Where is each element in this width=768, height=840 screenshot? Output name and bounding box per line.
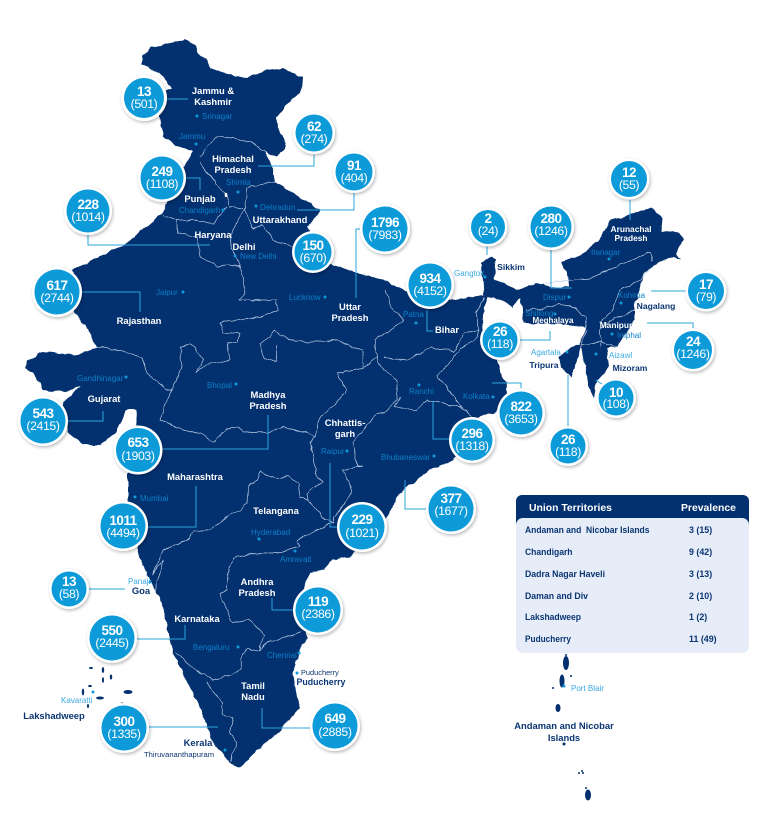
islands: Andaman and Nicobar	[552, 654, 591, 800]
state labels: garh	[335, 428, 355, 439]
capital labels: Kohima	[618, 291, 646, 300]
bubble: Tamil Nadu	[310, 701, 360, 751]
state labels	[23, 85, 675, 748]
state labels: Nadu	[241, 691, 265, 702]
bubble: Andhra Pradesh: (2386)	[301, 607, 335, 621]
capital labels: Puducherry	[301, 668, 339, 677]
bubble: Mizoram: 10	[609, 385, 623, 400]
bubble: Meghalaya: (118)	[487, 337, 513, 351]
table: Union Territories: Daman and Div	[525, 591, 588, 601]
capital labels: Kolkata	[463, 392, 490, 401]
bubble: Manipur: (1246)	[676, 347, 710, 361]
table: Union Territories: Andaman and Nicobar Islands	[525, 525, 650, 535]
bubble: Uttarakhand: (404)	[341, 171, 368, 185]
marker: Chandigarh territory	[225, 193, 227, 197]
bubble: Jammu and Kashmir	[121, 75, 167, 121]
table: Union Territories: Puducherry	[525, 634, 571, 644]
capital labels: Thiruvananthapuram	[144, 750, 214, 759]
bubble: Manipur	[672, 328, 714, 372]
bubble: Chhattisgarh: 229	[351, 512, 373, 527]
table: Union Territories: Chandigarh	[525, 547, 572, 557]
state labels: Pradesh	[614, 233, 648, 243]
capital markers	[92, 114, 622, 752]
bubble: Sikkim: 2	[484, 211, 492, 226]
state labels: Haryana	[194, 229, 232, 240]
islands: Lakshadweep	[82, 667, 132, 708]
capital labels: Gangtok	[454, 269, 485, 278]
bubble: Himachal Pradesh: (274)	[301, 132, 328, 146]
table: Union Territories: 11 (49)	[689, 634, 717, 644]
bubble: Jharkhand: 296	[461, 426, 484, 441]
capital labels: Jammu	[179, 132, 205, 141]
bubble: Madhya Pradesh: 653	[127, 435, 150, 450]
table: Union Territories: 3 (15)	[689, 525, 712, 535]
bubble: Karnataka: 550	[101, 623, 123, 638]
bubble: Assam: 280	[540, 211, 562, 226]
bubble: Arunachal Pradesh	[608, 158, 650, 200]
bubble: Uttarakhand: 91	[347, 158, 362, 173]
state labels: Karnataka	[174, 613, 220, 624]
state labels: Rajasthan	[117, 315, 162, 326]
capital labels: Ranchi	[409, 387, 434, 396]
state labels: Pradesh	[332, 312, 369, 323]
capital labels: Bhubaneswar	[381, 453, 430, 462]
bubble: Mizoram: (108)	[603, 397, 630, 411]
state labels: Meghalaya	[533, 316, 574, 325]
state labels: Lakshadweep	[23, 710, 85, 721]
bubble: Kerala: (1335)	[107, 727, 141, 741]
bubble: Goa: 13	[62, 574, 77, 589]
bubble: Punjab	[138, 154, 186, 202]
bubble: Arunachal Pradesh: 12	[622, 165, 636, 180]
state labels: Chhattis-	[325, 417, 365, 428]
capital labels: Bhopal	[207, 381, 232, 390]
bubble: Chhattisgarh: (1021)	[345, 526, 379, 540]
bubble: Rajasthan: 617	[46, 278, 68, 293]
state labels: Himachal	[212, 153, 254, 164]
bubble: Manipur: 24	[686, 334, 701, 349]
capital labels: Agartala	[531, 348, 561, 357]
capital labels: Mumbai	[140, 494, 169, 503]
capital labels: Panaji	[128, 577, 150, 586]
leader lines	[67, 99, 693, 728]
bubble: Jammu and Kashmir: (501)	[131, 97, 158, 111]
table: Union Territories: 2 (10)	[689, 591, 712, 601]
state labels: Bihar	[435, 324, 459, 335]
state labels: Sikkim	[497, 262, 525, 272]
state labels: Punjab	[184, 193, 216, 204]
bubble: Assam	[528, 204, 574, 250]
bubble: Kerala	[99, 703, 149, 753]
state labels: Uttar	[339, 301, 361, 312]
bubble: Tamil Nadu: 649	[324, 711, 346, 726]
capital labels: Port Blair	[571, 684, 604, 693]
bubble: Mizoram	[596, 378, 636, 418]
capital labels: Patna	[403, 310, 424, 319]
capital labels: Shimla	[226, 178, 251, 187]
state labels: Jammu &	[192, 85, 234, 96]
bubble: Gujarat: (2415)	[26, 419, 60, 433]
bubble: Arunachal Pradesh: (55)	[619, 178, 639, 192]
capital labels: Hyderabad	[251, 528, 290, 537]
state labels: Kashmir	[194, 96, 232, 107]
state labels: Tripura	[529, 360, 559, 370]
capital labels: Kavaratti	[61, 696, 93, 705]
state labels: Maharashtra	[167, 471, 224, 482]
bubble: Rajasthan: (2744)	[40, 291, 74, 305]
bubble: Karnataka: (2445)	[95, 636, 129, 650]
state labels: Kerala	[184, 737, 213, 748]
bubble: Madhya Pradesh	[114, 426, 162, 474]
state labels: Pradesh	[214, 164, 252, 175]
bubble: Sikkim: (24)	[478, 224, 498, 238]
bubble: Goa	[49, 569, 89, 609]
bubble: Karnataka	[87, 613, 137, 663]
bubble: Nagaland: 17	[699, 277, 713, 292]
capital labels: Gandhinagar	[77, 374, 124, 383]
bubble: Jammu and Kashmir: 13	[137, 84, 152, 99]
bubble: Odisha	[426, 484, 476, 534]
table: Union Territories: Union Territories	[529, 503, 612, 514]
capital labels: Bengaluru	[193, 643, 229, 652]
bubble: Andhra Pradesh: 119	[308, 594, 328, 609]
capital labels: Raipur	[321, 447, 345, 456]
bubble: Uttar Pradesh: 1796	[371, 215, 400, 230]
bubble: Meghalaya	[480, 320, 520, 360]
table: Union Territories: 3 (13)	[689, 569, 712, 579]
bubble: Bihar	[406, 261, 454, 309]
state labels: Andhra	[241, 576, 274, 587]
state labels: Uttarakhand	[253, 214, 308, 225]
capital labels: Amravati	[280, 555, 312, 564]
table: Union Territories: Lakshadweep	[525, 612, 582, 622]
capital labels: Shillong	[525, 309, 553, 318]
bubble: Uttarakhand	[333, 151, 375, 193]
bubble: Tamil Nadu: (2885)	[318, 725, 352, 739]
state labels: Delhi	[233, 241, 255, 252]
bubble: Haryana: (1014)	[71, 210, 105, 224]
bubble: Tripura: 26	[561, 432, 576, 447]
bubble: Assam: (1246)	[534, 224, 568, 238]
capital labels: Jaipur	[156, 288, 178, 297]
capital labels: Aizawl	[609, 351, 632, 360]
state labels: Andaman and Nicobar	[514, 720, 614, 731]
bubble: Tripura	[548, 426, 588, 466]
bubble: Goa: (58)	[59, 587, 79, 601]
bubble: Delhi	[292, 231, 334, 273]
capital labels: Srinagar	[202, 112, 233, 121]
bubble: Haryana	[64, 187, 112, 235]
bubble: Chhattisgarh	[337, 502, 387, 552]
capital labels: Imphal	[617, 331, 641, 340]
bubble: West Bengal: 822	[510, 399, 532, 414]
state labels: Telangana	[253, 505, 300, 516]
bubble: Jharkhand: (1318)	[455, 439, 489, 453]
bubble: Gujarat: 543	[32, 406, 55, 421]
state labels: Tamil	[241, 680, 265, 691]
bubble: Punjab: (1108)	[146, 177, 178, 191]
bubble: Meghalaya: 26	[493, 324, 508, 339]
capital labels: Lucknow	[289, 293, 321, 302]
bubble: Delhi: 150	[302, 238, 324, 253]
bubble: Jharkhand	[449, 417, 495, 463]
state labels: Puducherry	[297, 677, 346, 687]
state labels: Gujarat	[88, 393, 120, 404]
bubble: Himachal Pradesh	[293, 112, 335, 154]
bubble: Bihar: 934	[419, 271, 442, 286]
capital labels: Dehradun	[260, 203, 295, 212]
bubble: Rajasthan	[32, 267, 82, 317]
bubble: Nagaland: (79)	[696, 290, 716, 304]
bubble: Bihar: (4152)	[413, 284, 447, 298]
bubble: Uttar Pradesh	[360, 204, 410, 254]
capital labels	[61, 112, 646, 759]
bubble: Kerala: 300	[113, 714, 135, 729]
bubble: Haryana: 228	[77, 197, 100, 212]
capital labels: Chandigarh	[179, 206, 220, 215]
table: Union Territories: Prevalence	[681, 503, 736, 514]
bubble: Odisha: 377	[440, 491, 462, 506]
capital labels: Itanagar	[591, 248, 621, 257]
bubble: Madhya Pradesh: (1903)	[121, 449, 155, 463]
capital labels: Dispur	[543, 293, 566, 302]
table: Union Territories: Dadra Nagar Haveli	[525, 569, 605, 579]
state labels: Madhya	[251, 389, 286, 400]
bubble: Maharashtra: (4494)	[106, 526, 140, 540]
state labels: Manipur	[600, 320, 633, 330]
bubble: Maharashtra	[98, 501, 148, 551]
bubble: West Bengal: (3653)	[504, 412, 538, 426]
capital labels: Chennai	[267, 651, 297, 660]
bubble: Tripura: (118)	[555, 445, 581, 459]
state labels: Mizoram	[613, 363, 648, 373]
table: Union Territories	[516, 495, 749, 653]
state labels: Nagalang	[637, 301, 675, 311]
bubble: Gujarat	[18, 396, 68, 446]
bubble: Sikkim	[468, 208, 508, 246]
state labels: Islands	[548, 732, 580, 743]
bubble: Maharashtra: 1011	[109, 513, 138, 528]
bubble: Punjab: 249	[151, 164, 173, 179]
bubble: Nagaland	[686, 270, 726, 312]
table: Union Territories: 9 (42)	[689, 547, 712, 557]
bubble: Odisha: (1677)	[434, 504, 468, 518]
state labels: Arunachal	[611, 224, 651, 234]
state labels: Pradesh	[238, 587, 276, 598]
bubble: West Bengal	[497, 389, 545, 437]
state labels: Pradesh	[250, 400, 287, 411]
bubble: Andhra Pradesh	[293, 585, 343, 635]
map of India	[25, 40, 684, 768]
bubble: Uttar Pradesh: (7983)	[368, 228, 402, 242]
bubble: Himachal Pradesh: 62	[307, 119, 321, 134]
state labels: Goa	[132, 585, 151, 596]
table: Union Territories: 1 (2)	[689, 612, 707, 622]
bubble: Delhi: (670)	[300, 251, 327, 265]
capital labels: New Delhi	[240, 252, 277, 261]
